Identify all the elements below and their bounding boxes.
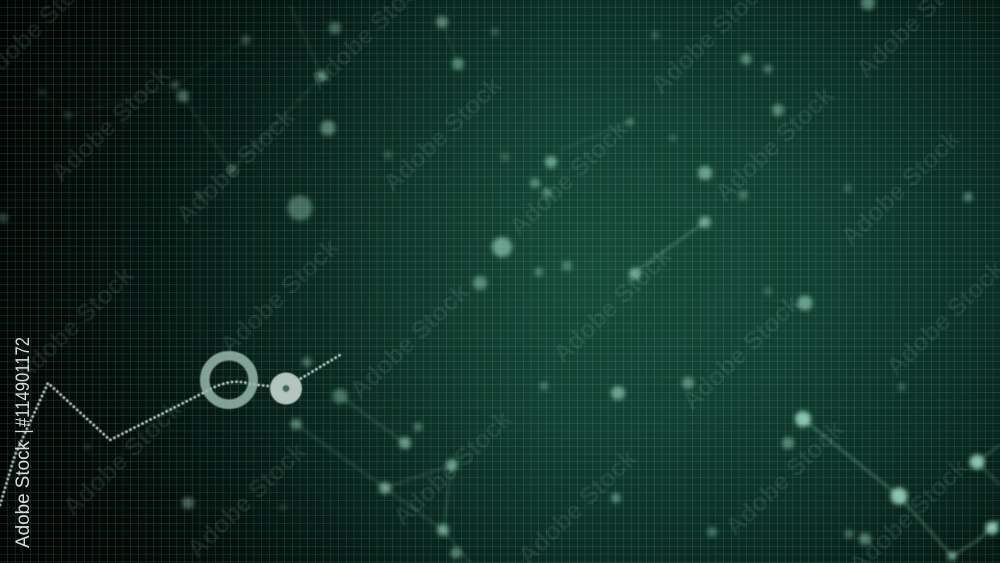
watermark pattern: Adobe Stock — [388, 405, 517, 531]
watermark pattern: Adobe Stock — [548, 242, 677, 368]
watermark pattern: Adobe Stock — [720, 415, 849, 541]
watermark pattern: Adobe Stock — [345, 278, 474, 404]
watermark pattern: Adobe Stock — [836, 125, 965, 251]
dotted line chart — [0, 355, 340, 505]
watermark pattern: Adobe Stock — [58, 395, 187, 521]
vertical stock id caption: #114901172 — [12, 337, 34, 427]
watermark pattern: Adobe Stock — [171, 103, 300, 229]
watermark pattern: Adobe Stock — [677, 289, 806, 415]
solid dot marker — [270, 372, 302, 404]
watermark pattern: Adobe Stock — [182, 437, 311, 563]
vertical stock id caption: | — [12, 430, 34, 434]
watermark pattern: Adobe Stock — [378, 71, 507, 197]
watermark pattern: Adobe Stock — [46, 61, 175, 187]
vertical stock id caption — [12, 337, 34, 548]
ring marker — [205, 356, 253, 404]
watermark pattern: Adobe Stock — [215, 233, 344, 359]
vertical stock id caption: Adobe Stock — [12, 441, 34, 548]
watermark pattern: Adobe Stock — [710, 81, 839, 207]
watermark pattern: Adobe Stock — [10, 261, 139, 387]
watermark pattern: Adobe Stock — [504, 115, 633, 241]
